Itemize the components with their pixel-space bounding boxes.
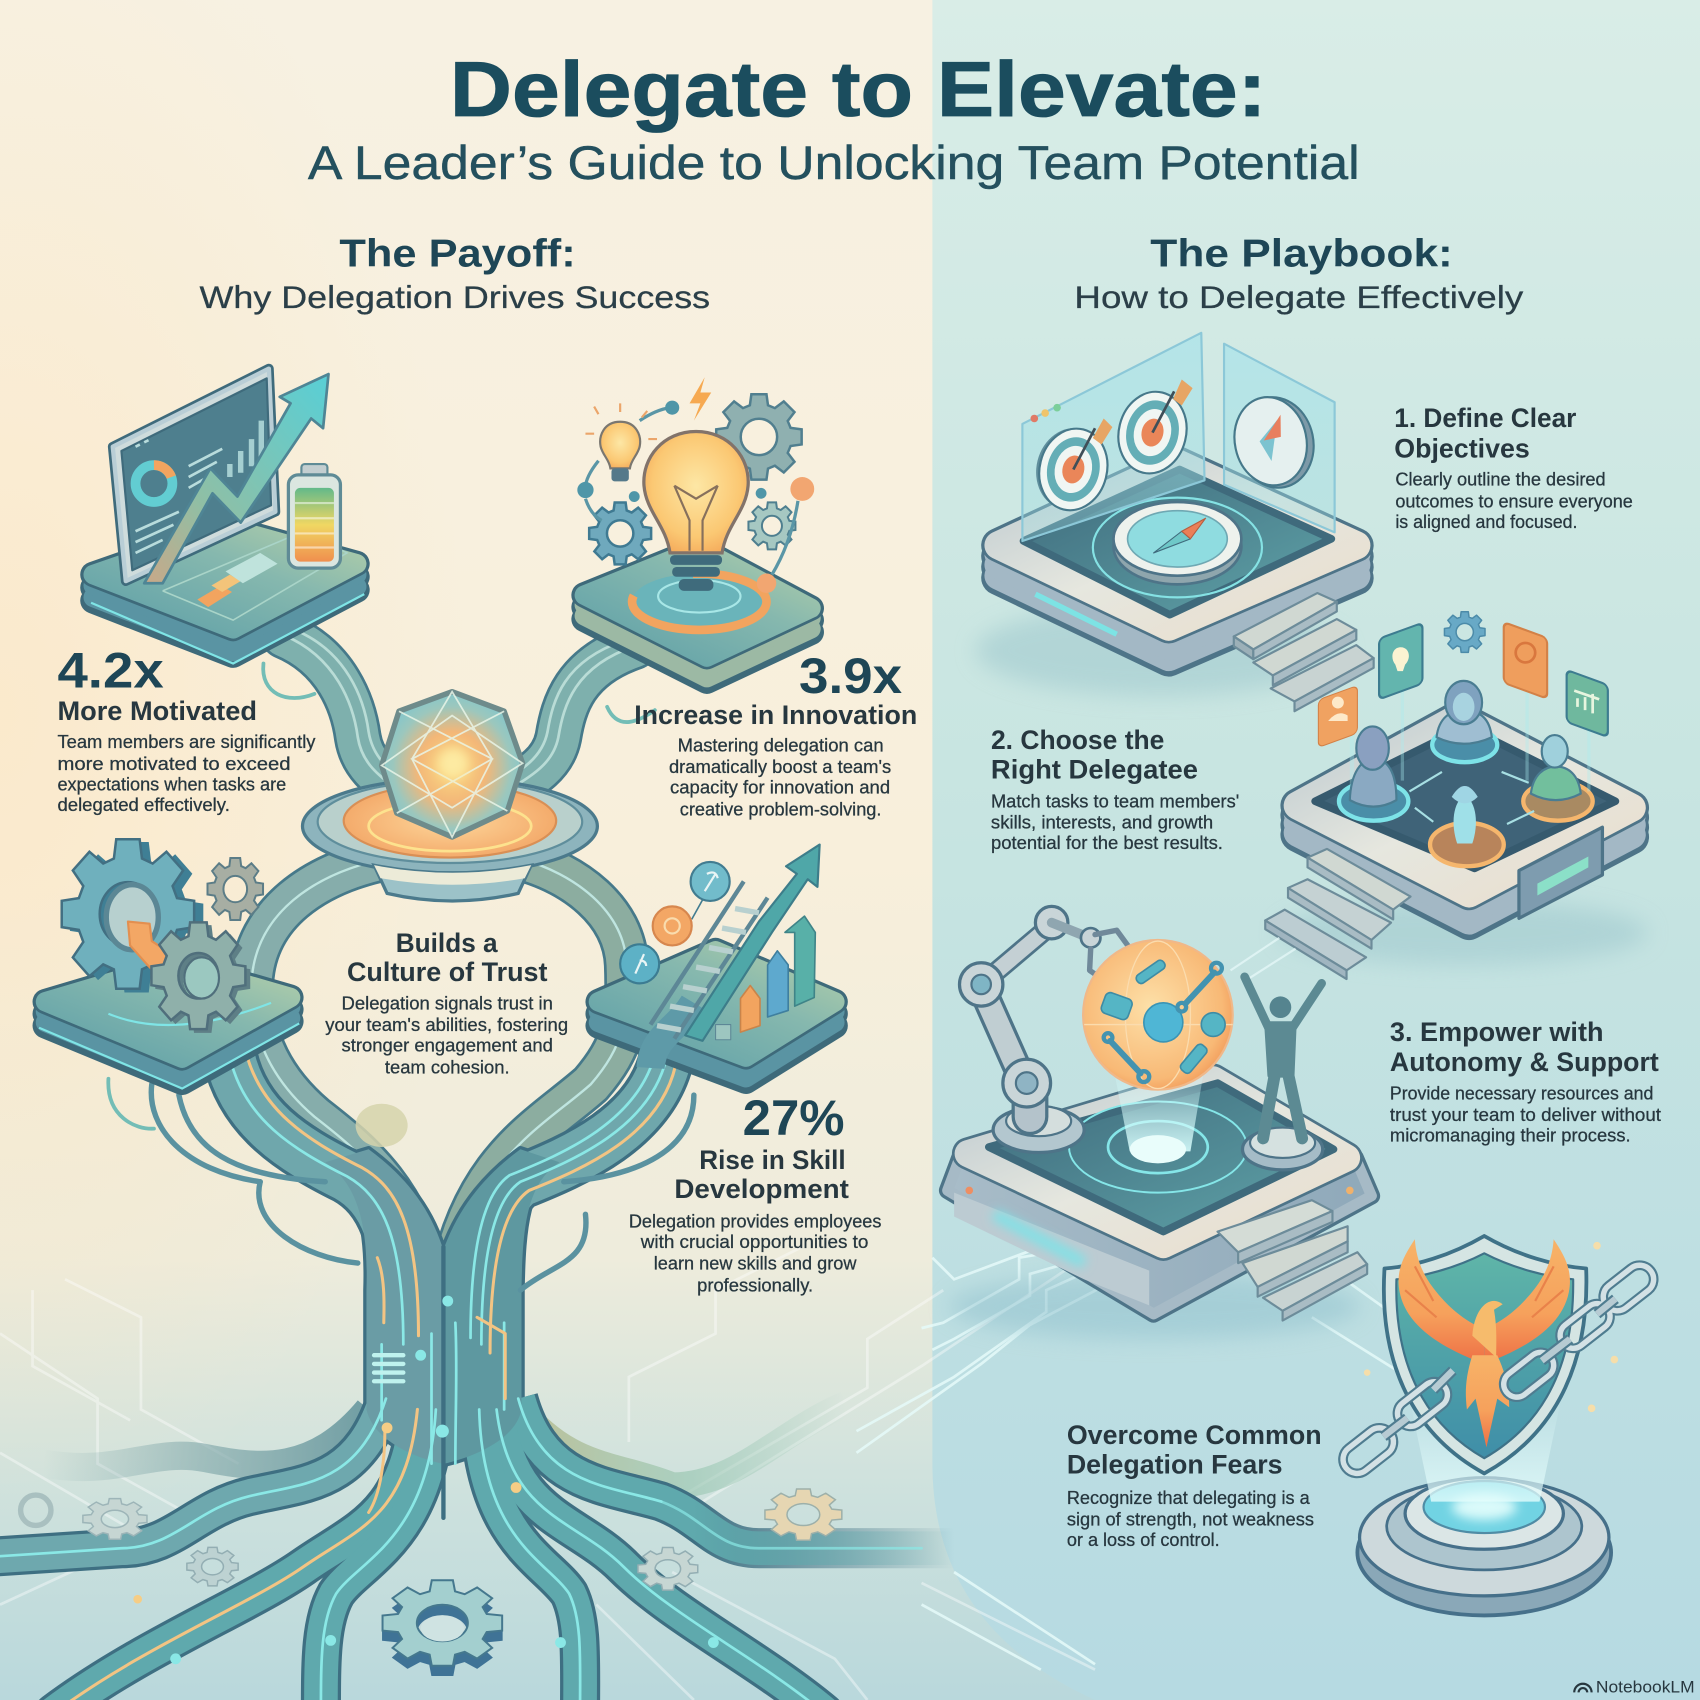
broken chain left (1337, 1370, 1453, 1479)
icon: large base gear (383, 1580, 502, 1675)
text: step 3 empower with autonomy and support: trust your team to deliver without (1390, 1104, 1661, 1125)
sparkles (1364, 1242, 1618, 1412)
knot on branch (356, 1104, 408, 1147)
small gear (208, 858, 263, 920)
large gear (62, 839, 203, 992)
stat: 27% rise in skill development: with crucial opportunities to (640, 1231, 868, 1252)
hanging wires (151, 1084, 694, 1290)
arrow fletching (1093, 379, 1193, 445)
robot arm (960, 906, 1134, 1152)
stat: 4.2x more motivated: Team members are significantly (57, 731, 316, 752)
stat: 27% rise in skill development: learn new skills and grow (654, 1253, 857, 1274)
stat: 3.9x increase in innovation: Mastering delegation can (678, 734, 884, 755)
gem (382, 692, 523, 837)
person figures (1350, 681, 1581, 843)
text: overcome common delegation fears: Delegation Fears (1067, 1448, 1283, 1479)
light strip (994, 1214, 1084, 1263)
platform (584, 549, 811, 681)
person with raised arms (1242, 977, 1323, 1170)
platform (91, 528, 364, 664)
tree: roots, trunk and branches (0, 630, 954, 1700)
text: step 3 empower with autonomy and support: Provide necessary resources and (1390, 1082, 1653, 1103)
subtitle: A Leader’s Guide to Unlocking Team Potential (308, 137, 1360, 190)
circuit lines from platform 3 (857, 1231, 1420, 1670)
platform (39, 964, 299, 1089)
fill of trunk and roots (0, 1057, 954, 1700)
text: overcome common delegation fears: Overcome Common (1067, 1419, 1322, 1450)
text: overcome common delegation fears (1067, 1419, 1322, 1550)
text: step 3 empower with autonomy and support: Autonomy & Support (1390, 1046, 1659, 1077)
text: overcome common delegation fears: Recognize that delegating is a (1067, 1487, 1310, 1508)
mini bars (716, 916, 815, 1040)
panel: culture of trust gears platform (39, 839, 299, 1089)
arrows between people (1409, 772, 1534, 824)
text: builds a culture of trust: Culture of Trust (347, 956, 548, 987)
text: builds a culture of trust (325, 927, 568, 1077)
text: step 1 define clear objectives: Clearly outline the desired (1395, 469, 1606, 490)
text: builds a culture of trust: Delegation signals trust in (342, 992, 553, 1013)
text: builds a culture of trust: stronger engagement and (342, 1035, 553, 1056)
stat: 4.2x more motivated: 4.2x (57, 642, 164, 698)
stat: 4.2x more motivated: expectations when tasks are (57, 773, 286, 794)
glowing circuit lines (0, 1051, 922, 1700)
stairs (1265, 849, 1411, 979)
watermark: NotebookLM: NotebookLM (1596, 1678, 1695, 1696)
broken chain right (1498, 1260, 1659, 1402)
target one (1028, 417, 1117, 518)
text: step 2 choose the right delegatee: skills, interests, and growth (991, 811, 1213, 832)
left gear (589, 502, 651, 564)
indicator lights (965, 1187, 1354, 1194)
central gem with ring (302, 692, 597, 901)
text: step 1 define clear objectives: 1. Define Clear (1394, 402, 1577, 433)
text: step 1 define clear objectives: is aligned and focused. (1395, 511, 1577, 532)
text: step 2 choose the right delegatee: Match tasks to team members' (991, 791, 1239, 812)
text: step 2 choose the right delegatee: 2. Choose the (991, 724, 1164, 755)
faint circuit background lines (0, 1247, 1095, 1700)
platform body (948, 1079, 1371, 1314)
target two (1110, 381, 1196, 481)
growth arrow (144, 374, 329, 583)
wire over platform (651, 1003, 694, 1068)
panel: 27% platform with ladder (598, 845, 835, 1081)
lightning (690, 377, 711, 421)
text: step 1 define clear objectives (1394, 402, 1633, 532)
text: step 2 choose the right delegatee: potential for the best results. (991, 832, 1223, 853)
text: overcome common delegation fears: sign of strength, not weakness (1067, 1508, 1314, 1529)
heading: the payoff: The Payoff: (339, 233, 576, 276)
panel: 3.9x platform with light bulb (577, 377, 814, 681)
stat: 3.9x increase in innovation: creative problem-solving. (680, 798, 881, 819)
beam (1115, 1073, 1203, 1151)
text: step 2 choose the right delegatee: Right Delegatee (991, 753, 1198, 784)
connectors and nodes (585, 408, 798, 575)
light beams (1350, 672, 1590, 791)
device panel (1519, 827, 1602, 918)
ladder (651, 881, 768, 1039)
text: builds a culture of trust: your team's abilities, fostering (325, 1014, 568, 1035)
connecting light lines (1231, 938, 1296, 981)
text: step 3 empower with autonomy and support (1390, 1016, 1661, 1146)
stat: 4.2x more motivated: More Motivated (57, 695, 257, 726)
text: builds a culture of trust: team cohesion. (385, 1056, 510, 1077)
panel: step 3 platform (948, 906, 1371, 1339)
stat: 3.9x increase in innovation: Increase in Innovation (634, 699, 917, 730)
panel: step 2 platform (1231, 612, 1648, 981)
monitor (113, 369, 275, 581)
tree: pale background roots (43, 1404, 846, 1485)
text: step 3 empower with autonomy and support: 3. Empower with (1390, 1016, 1604, 1047)
phoenix (1399, 1239, 1570, 1447)
stat: 27% rise in skill development: Delegation provides employees (629, 1210, 881, 1231)
large gear (716, 394, 802, 480)
stat: 4.2x more motivated: more motivated to exceed (57, 753, 291, 774)
platform base (999, 463, 1356, 659)
card: idea (1379, 623, 1422, 699)
hologram beam (1409, 1399, 1561, 1502)
bars on platform (197, 553, 278, 607)
ladder arrow (685, 845, 820, 1041)
platform (598, 951, 835, 1081)
stat: 27% rise in skill development (629, 1090, 881, 1295)
stairs (1234, 593, 1374, 711)
heading: the playbook (1074, 233, 1524, 315)
stat: 27% rise in skill development: 27% (743, 1090, 845, 1146)
tools sphere (1083, 940, 1233, 1090)
panel: playbook background (932, 0, 1700, 1700)
panel: overcome fears shield (1337, 1236, 1659, 1615)
platform top (999, 463, 1356, 627)
panel: 4.2x platform with monitor (91, 369, 364, 664)
heading: the payoff: Why Delegation Drives Success (199, 280, 710, 315)
floating skill badges (620, 862, 730, 983)
card: target (1504, 622, 1547, 699)
text: overcome common delegation fears: or a loss of control. (1067, 1529, 1220, 1550)
panel: step 1 platform (976, 333, 1374, 711)
inner screen (989, 1083, 1334, 1232)
card: person (1318, 686, 1357, 747)
hologram rings (1069, 1102, 1247, 1193)
stat: 3.9x increase in innovation: 3.9x (799, 648, 902, 704)
dark screen (1315, 726, 1615, 868)
stat: 4.2x more motivated: delegated effectively. (57, 794, 230, 815)
stat: 27% rise in skill development: Rise in Skill (699, 1144, 846, 1175)
pale gears on the ground (21, 1489, 842, 1590)
icon: gear (1444, 612, 1485, 652)
stat: 27% rise in skill development: professionally. (697, 1274, 813, 1295)
text: step 1 define clear objectives: outcomes to ensure everyone (1395, 490, 1633, 511)
stat: 4.2x more motivated (57, 642, 316, 815)
main bulb (644, 432, 748, 591)
right gear (748, 502, 795, 549)
stat: 3.9x increase in innovation (634, 648, 917, 819)
screen (1023, 469, 1331, 615)
glass panel right (1224, 344, 1335, 532)
heading: the playbook: How to Delegate Effectively (1074, 280, 1524, 315)
heading: the playbook: The Playbook: (1150, 233, 1453, 276)
interlocked gear (151, 922, 250, 1032)
title: Delegate to Elevate: (450, 45, 1266, 133)
stat: 27% rise in skill development: Development (674, 1173, 849, 1204)
text: step 3 empower with autonomy and support: micromanaging their process. (1390, 1125, 1631, 1146)
shield (1384, 1236, 1586, 1473)
pedestal (1357, 1478, 1611, 1615)
thin branch loops (251, 630, 634, 1290)
text: step 1 define clear objectives: Objectives (1394, 433, 1530, 464)
heading: the payoff (199, 233, 710, 315)
stat: 3.9x increase in innovation: capacity for innovation and (670, 777, 890, 798)
text: step 2 choose the right delegatee (991, 724, 1239, 853)
outlines of trunk and roots (0, 1057, 954, 1700)
card: chart (1567, 670, 1608, 737)
platform body (1298, 718, 1632, 923)
small bulb (585, 403, 657, 481)
ring base (302, 778, 597, 874)
stairs (1218, 1200, 1367, 1321)
tree: glowing nodes (133, 1296, 719, 1664)
battery (288, 464, 340, 568)
stat: 3.9x increase in innovation: dramatically boost a team's (669, 756, 891, 777)
glass panel left (1022, 333, 1205, 541)
orange connector (128, 922, 171, 980)
flat compass (1113, 502, 1241, 584)
people circles (1339, 727, 1593, 866)
text: builds a culture of trust: Builds a (396, 927, 499, 958)
vertical compass (1226, 389, 1322, 495)
